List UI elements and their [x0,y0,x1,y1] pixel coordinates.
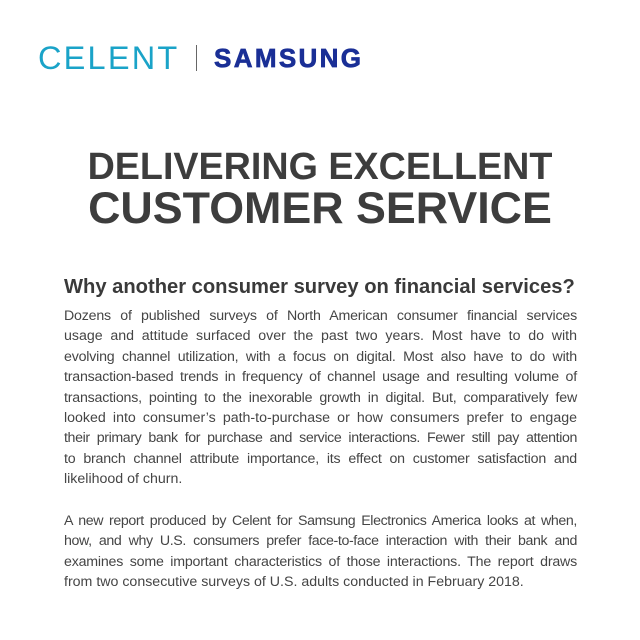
logo: Celent: CELENT [38,40,179,76]
paragraph 1: evolving channel utilization, with a focus on digital. Most also have to do with [64,349,577,365]
paragraph 1: looked into consumer’s path-to-purchase or how consumers prefer to engage [64,410,577,426]
paragraph 2: examines some important characteristics of those interactions. The report draws [64,554,577,570]
paragraph 2: from two consecutive surveys of U.S. adults conducted in February 2018. [64,574,524,590]
paragraph 2: A new report produced by Celent for Samsung Electronics America looks at when, [64,513,577,529]
paragraph 1 [64,308,578,487]
paragraph 1: Dozens of published surveys of North American consumer financial services [64,308,577,324]
title [88,145,552,233]
title: DELIVERING EXCELLENT [88,145,552,187]
section heading: Why another consumer survey on financial services? [64,276,575,298]
paragraph 1: usage and attitude surfaced over the past two years. Most have to do with [64,328,577,344]
paragraph 1: likelihood of churn. [64,471,182,487]
logo divider [196,45,197,71]
title: CUSTOMER SERVICE [88,183,552,233]
paragraph 1: transactions, pointing to the inexorable growth in digital. But, comparatively few [64,390,577,406]
paragraph 2 [64,513,577,590]
paragraph 2: how, and why U.S. consumers prefer face-to-face interaction with their bank and [64,533,577,549]
paragraph 1: their primary bank for purchase and service interactions. Fewer still pay attention [64,430,577,446]
paragraph 1: transaction-based trends in frequency of channel usage and resulting volume of [64,369,577,385]
paragraph 1: to branch channel attribute importance, its effect on customer satisfaction and [64,451,577,467]
logo: Samsung: SAMSUNG [214,43,363,73]
